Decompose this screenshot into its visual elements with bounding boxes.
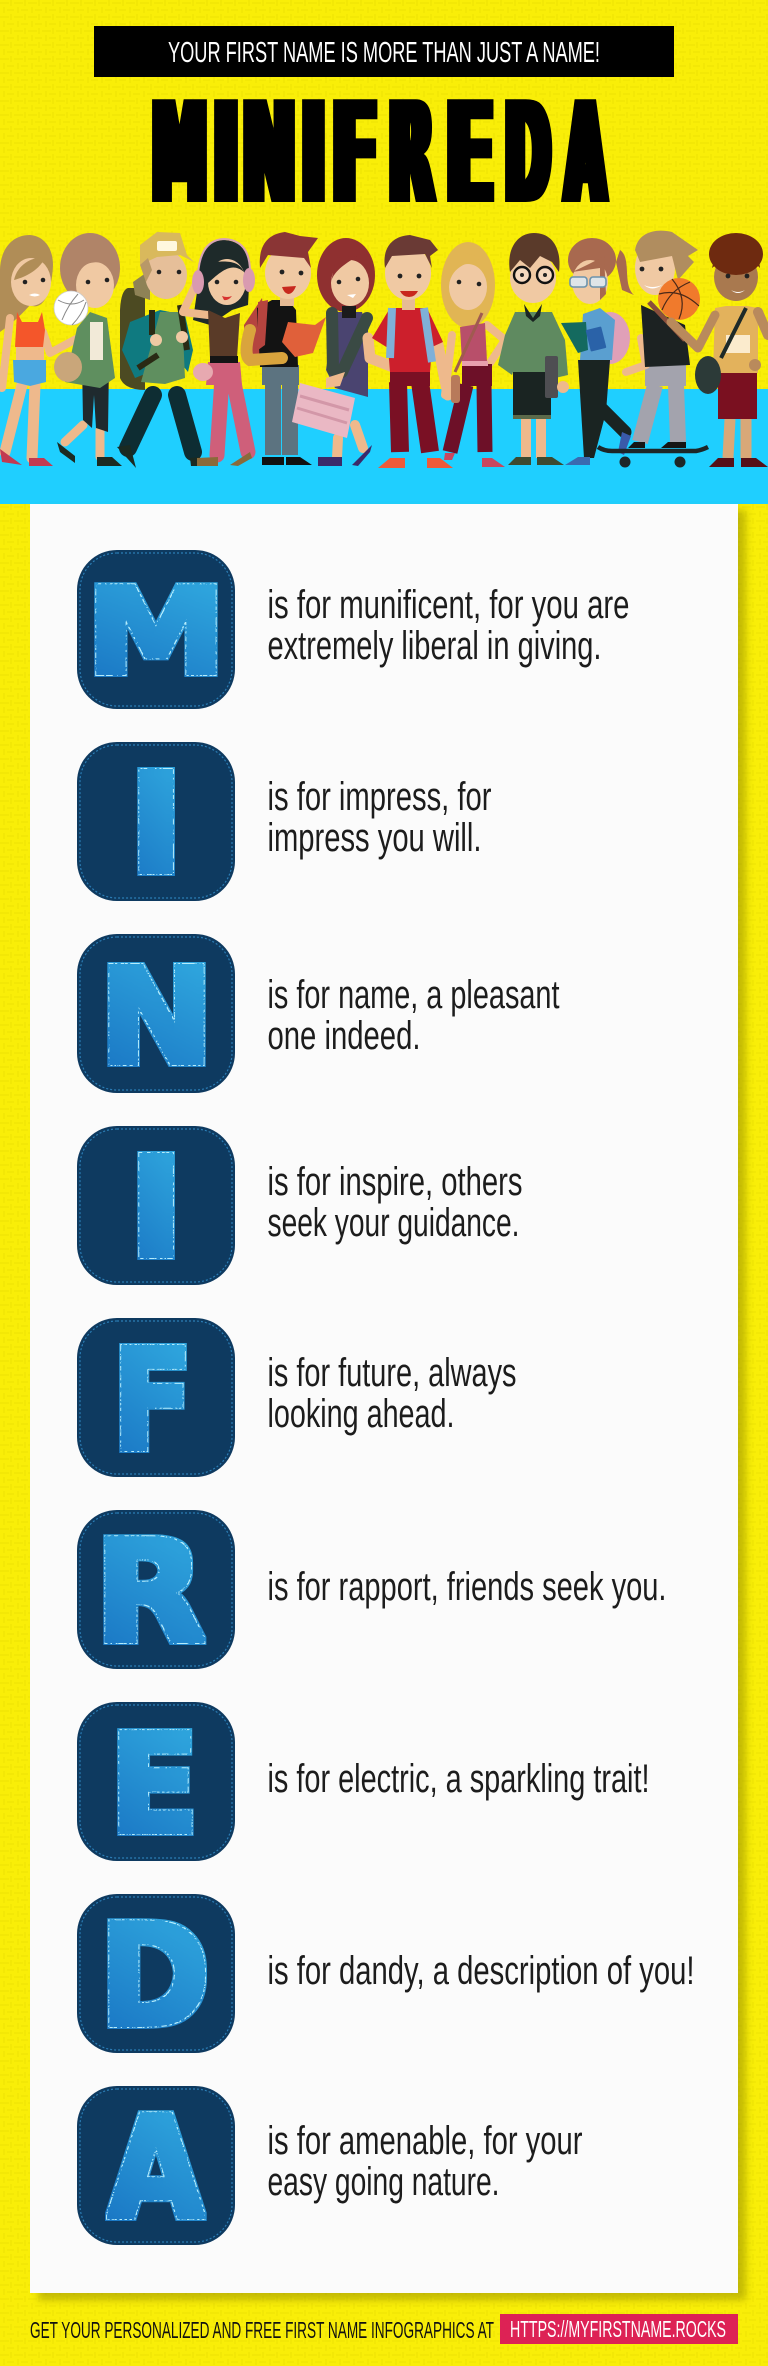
row R — [77, 1510, 666, 1675]
panel shadow — [38, 510, 746, 2300]
row I second — [77, 1126, 522, 1289]
text: M line: extremely liberal in giving. — [268, 624, 602, 668]
icon: letter I — [77, 742, 235, 905]
person 6: girl with red bob and pink bag — [292, 238, 375, 466]
person 1: girl in orange top — [0, 235, 78, 466]
icon: letter M — [77, 550, 235, 709]
header banner: tagline — [94, 26, 674, 77]
person 11: skateboarder with basketball — [598, 231, 708, 468]
person 12: boy in jersey with bag — [671, 233, 768, 467]
text: F line — [268, 1351, 516, 1436]
text: F line: looking ahead. — [268, 1392, 454, 1436]
icon: letter F: F — [112, 1320, 193, 1483]
person 4: girl with headphones — [183, 239, 255, 466]
text: A — [566, 72, 605, 236]
panel background — [30, 504, 738, 2293]
person 2: girl with volleyball and jacket — [54, 233, 122, 466]
icon: letter F — [77, 1318, 235, 1483]
text: N line: is for name, a pleasant — [268, 973, 560, 1017]
row A — [77, 2086, 582, 2251]
text: I line — [268, 775, 492, 860]
title: name: E — [446, 72, 494, 236]
text: I line: impress you will. — [268, 816, 482, 860]
icon: letter I second: I — [127, 1127, 186, 1289]
icon: letter M: M — [85, 564, 227, 702]
panel: letter meanings — [30, 504, 746, 2300]
footer call to action — [30, 2314, 738, 2344]
row E — [77, 1702, 650, 1865]
text: I second line: seek your guidance. — [268, 1201, 520, 1245]
person 5: boy reading book with backpack — [244, 232, 326, 465]
icon: letter A: A — [108, 2087, 203, 2251]
person 9: boy with glasses and folder — [498, 233, 569, 465]
person 7: boy in red shirt with straps — [368, 235, 453, 468]
icon: letter D: D — [99, 1895, 210, 2059]
text: A line: easy going nature. — [268, 2160, 500, 2204]
icon: letter N — [77, 934, 235, 1095]
row D — [77, 1894, 694, 2059]
text: A line — [268, 2119, 582, 2204]
row N — [77, 934, 560, 1095]
title: name: M — [152, 72, 207, 236]
title: name — [152, 72, 605, 236]
title: name: R — [389, 72, 434, 236]
text: A line: is for amenable, for your — [268, 2119, 582, 2163]
text: M line — [268, 583, 630, 668]
title: name: N — [242, 72, 296, 236]
icon: letter I: I — [127, 743, 186, 905]
illustration: group of young people — [0, 231, 768, 504]
person 3: backpacker with cap — [117, 232, 200, 468]
icon: letter A — [77, 2086, 235, 2251]
text: N line: one indeed. — [268, 1014, 420, 1058]
person 8: blonde girl with shoulder bag — [441, 242, 505, 467]
icon: letter E: E — [109, 1706, 199, 1865]
row F — [77, 1318, 516, 1483]
text: I line: is for impress, for — [268, 775, 492, 819]
text: N line — [268, 973, 560, 1058]
person 10: girl with ponytail and books — [561, 238, 634, 465]
title: name: F — [332, 72, 378, 236]
icon: letter E — [77, 1702, 235, 1865]
text: M line: is for munificent, for you are — [268, 583, 630, 627]
icon: letter R: R — [94, 1511, 205, 1675]
title: name: I — [212, 72, 240, 236]
title: name: D — [505, 72, 550, 236]
row M — [77, 550, 630, 709]
icon: letter R — [77, 1510, 235, 1675]
icon: letter I second — [77, 1126, 235, 1289]
title: name: I — [301, 72, 326, 236]
row I — [77, 742, 492, 905]
text: I second line — [268, 1160, 522, 1245]
text: F line: is for future, always — [268, 1351, 516, 1395]
ground band — [0, 389, 768, 504]
text: I second line: is for inspire, others — [268, 1160, 522, 1204]
icon: letter N: N — [99, 941, 214, 1095]
